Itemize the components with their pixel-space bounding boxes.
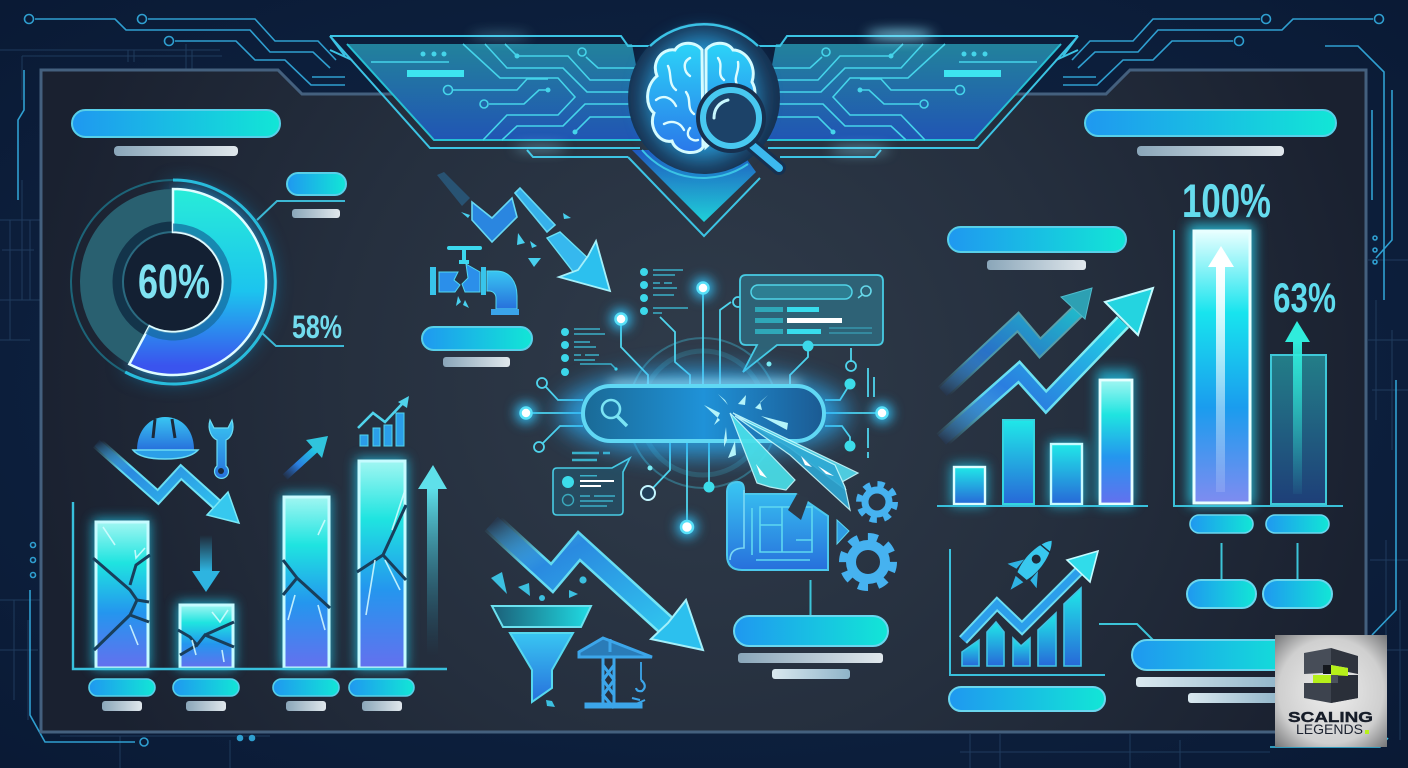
comparison bar chart — [1174, 174, 1343, 506]
bar glows — [93, 458, 407, 669]
rocket chart — [950, 529, 1105, 675]
arrow: down to small bar — [192, 535, 220, 592]
icon: triangle marker — [837, 520, 849, 544]
icon: gear small — [860, 485, 894, 519]
search bar glow — [558, 369, 848, 457]
icon: broken pipe — [430, 246, 519, 315]
icon: search magnifier — [602, 400, 627, 426]
central search network — [516, 268, 892, 537]
axes — [1174, 230, 1343, 506]
donut callout 58% — [262, 309, 344, 346]
donut chart 60% — [71, 180, 275, 384]
speech bubble panel — [740, 275, 883, 372]
big bar arrow — [1208, 246, 1234, 492]
right header pill — [1085, 110, 1336, 156]
bottom right callout — [1099, 624, 1302, 703]
donut callout 58%: 58% — [292, 309, 342, 345]
wing sparkles — [470, 31, 934, 153]
icon: crane — [579, 638, 652, 708]
left header pill — [72, 110, 280, 156]
value 63%: 63% — [1273, 274, 1336, 321]
circuit traces: top right — [1063, 14, 1384, 85]
bar glow — [951, 370, 1134, 506]
header emblem — [330, 22, 1078, 236]
icon: gear large — [844, 538, 892, 586]
bars — [954, 467, 985, 504]
icon: wrench — [209, 420, 233, 478]
connector lines — [526, 288, 882, 527]
rocket chart label — [949, 687, 1105, 711]
icon: funnel — [491, 572, 591, 707]
baseline — [937, 505, 1148, 507]
icon: brain — [648, 43, 755, 153]
icon: mini bar chart — [358, 396, 409, 446]
donut callout top — [257, 173, 346, 220]
dim bar — [1271, 355, 1326, 504]
cracked bar chart — [73, 458, 447, 711]
logo text: SCALING — [1288, 709, 1373, 726]
logo: Scaling Legends — [1275, 635, 1387, 747]
donut value: 60% — [138, 256, 210, 309]
emblem pointer — [632, 150, 756, 222]
chart axes — [73, 502, 447, 669]
bar captions — [102, 701, 402, 711]
right mid pill — [948, 227, 1126, 270]
cracked bars — [96, 461, 405, 668]
arrow: growth front — [942, 288, 1153, 440]
arrow: zigzag down over bars — [97, 443, 239, 523]
big bar glow — [1188, 224, 1255, 506]
comparison labels — [1187, 515, 1332, 608]
left bullet list — [561, 328, 618, 376]
arrow: growth back — [943, 288, 1092, 392]
central dark disc — [628, 22, 780, 174]
small speech bubble — [553, 453, 630, 515]
rocket chart bars — [962, 588, 1081, 666]
right wing — [756, 36, 1078, 157]
arrow: broken descending — [437, 172, 610, 291]
big bar — [1194, 231, 1250, 503]
circuit traces: top left — [24, 14, 345, 85]
logo: Scaling Legends: LEGENDS — [1296, 721, 1363, 737]
arrow: small up right — [285, 436, 328, 477]
pipe label — [422, 327, 532, 367]
left wing — [330, 36, 652, 157]
icon: hard hat — [133, 417, 198, 459]
glass shards — [704, 394, 858, 510]
arrow: large descending — [492, 523, 703, 650]
search bar — [583, 386, 824, 441]
center bottom label — [734, 580, 888, 679]
bar label pills — [89, 679, 414, 696]
rocket chart arrow — [963, 570, 1080, 640]
icon: magnifying glass — [696, 83, 779, 168]
arrow: tall up — [418, 465, 447, 656]
dim bar arrow — [1285, 321, 1310, 494]
growth bar chart — [937, 370, 1148, 506]
radar rings — [628, 338, 778, 488]
value 100%: 100% — [1182, 174, 1271, 227]
icon: rocket — [996, 529, 1066, 602]
top bullet list — [640, 268, 688, 315]
logo mark — [1304, 648, 1358, 703]
glowing nodes — [516, 278, 892, 537]
icon: blueprint — [727, 482, 828, 570]
